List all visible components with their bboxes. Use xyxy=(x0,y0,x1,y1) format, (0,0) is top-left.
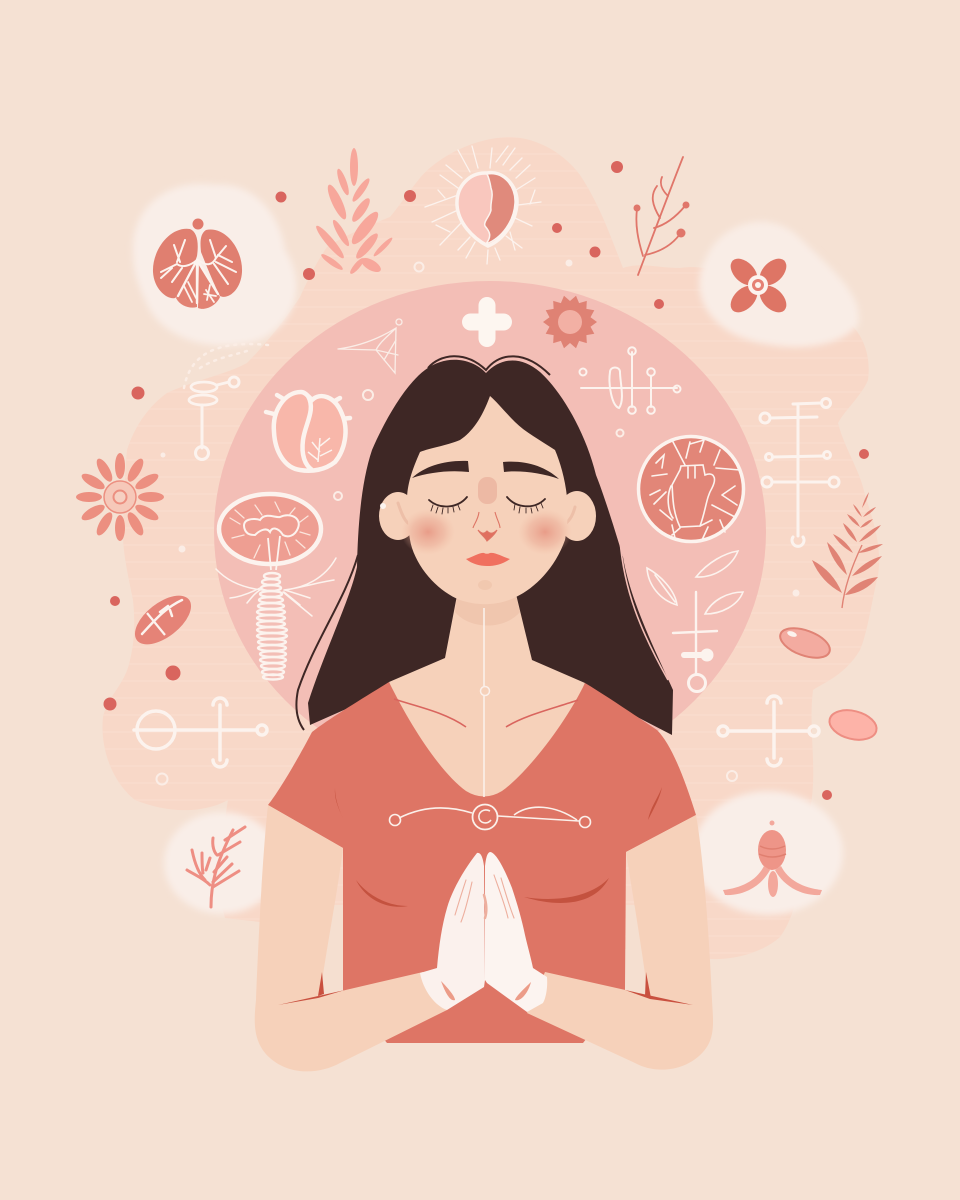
icon: figure bottom right xyxy=(723,820,822,897)
large pink circle xyxy=(214,281,766,783)
left ear xyxy=(379,492,417,540)
lips xyxy=(466,553,510,566)
pale filled dots xyxy=(160,260,800,596)
icon: coral branch xyxy=(634,157,690,275)
right eyebrow xyxy=(503,462,559,479)
peach background blob xyxy=(102,137,879,959)
left closed eye xyxy=(429,497,467,514)
hair thin strand top xyxy=(428,356,550,375)
icon: pill right lower xyxy=(826,706,880,744)
collarbones xyxy=(394,699,578,727)
white soft blob: bottom left xyxy=(164,812,280,914)
right arm xyxy=(527,815,713,1070)
icon: heart outline xyxy=(266,392,350,471)
icon: pill right upper xyxy=(776,622,834,664)
right cheek blush xyxy=(518,509,572,555)
finger lines xyxy=(455,875,514,922)
icon: coral gear xyxy=(543,296,597,348)
hair xyxy=(308,360,673,735)
dotted arc left xyxy=(184,344,268,388)
icon: circular skin with hand xyxy=(638,436,744,542)
decorative rings xyxy=(156,262,737,784)
icon: lungs xyxy=(153,218,242,309)
shirt folds xyxy=(335,787,662,907)
white soft blob: top left xyxy=(133,184,296,346)
icon: plant bottom left xyxy=(187,827,245,907)
icon: brain and spine xyxy=(216,494,336,680)
icon: leaf sprig right xyxy=(812,492,883,608)
left earring xyxy=(380,503,386,509)
icon: cross symbol right xyxy=(718,696,819,766)
white soft blob: top right xyxy=(699,222,859,347)
background gaps beside torso xyxy=(320,905,650,998)
chin dots xyxy=(478,580,492,590)
hair thin outer strand left xyxy=(296,555,358,730)
icon: leaf sprig top xyxy=(313,148,394,276)
icon: white plus xyxy=(462,297,512,347)
ear inner details xyxy=(398,503,575,523)
left hand xyxy=(420,853,485,1010)
chest spiral symbol xyxy=(390,804,590,830)
centre body line xyxy=(480,608,490,797)
neck shadow xyxy=(455,596,520,626)
icon: four-petal flower xyxy=(726,254,791,317)
left eyebrow xyxy=(412,461,469,478)
left cheek blush xyxy=(401,509,455,555)
face xyxy=(407,396,568,604)
icon: circuit symbol top right xyxy=(580,347,680,414)
neck and chest xyxy=(389,590,585,805)
right hand xyxy=(485,852,547,1012)
nose xyxy=(473,512,500,541)
icon: cross symbol left xyxy=(134,698,267,767)
right ear xyxy=(558,491,596,541)
right closed eye xyxy=(507,497,545,513)
nose bridge patch xyxy=(478,477,497,504)
pink hair strand right xyxy=(620,540,668,680)
left arm xyxy=(255,805,447,1071)
icon: pill left xyxy=(127,586,199,654)
decorative dots xyxy=(104,161,869,800)
arm crease lines xyxy=(278,972,693,1005)
white soft blob: bottom right xyxy=(693,791,843,915)
icon: leaves with key symbol xyxy=(647,551,743,692)
icon: sunburst flower left xyxy=(76,453,164,541)
icon: top heart with rays xyxy=(425,146,541,264)
icon: key symbol left xyxy=(189,377,239,460)
icon: triangular line glyph xyxy=(338,319,402,373)
woman xyxy=(255,356,713,1071)
shirt xyxy=(268,682,696,1043)
icon: large circuit symbol right xyxy=(760,398,839,546)
praying hands xyxy=(420,852,547,1012)
wrist marks xyxy=(441,981,455,1000)
